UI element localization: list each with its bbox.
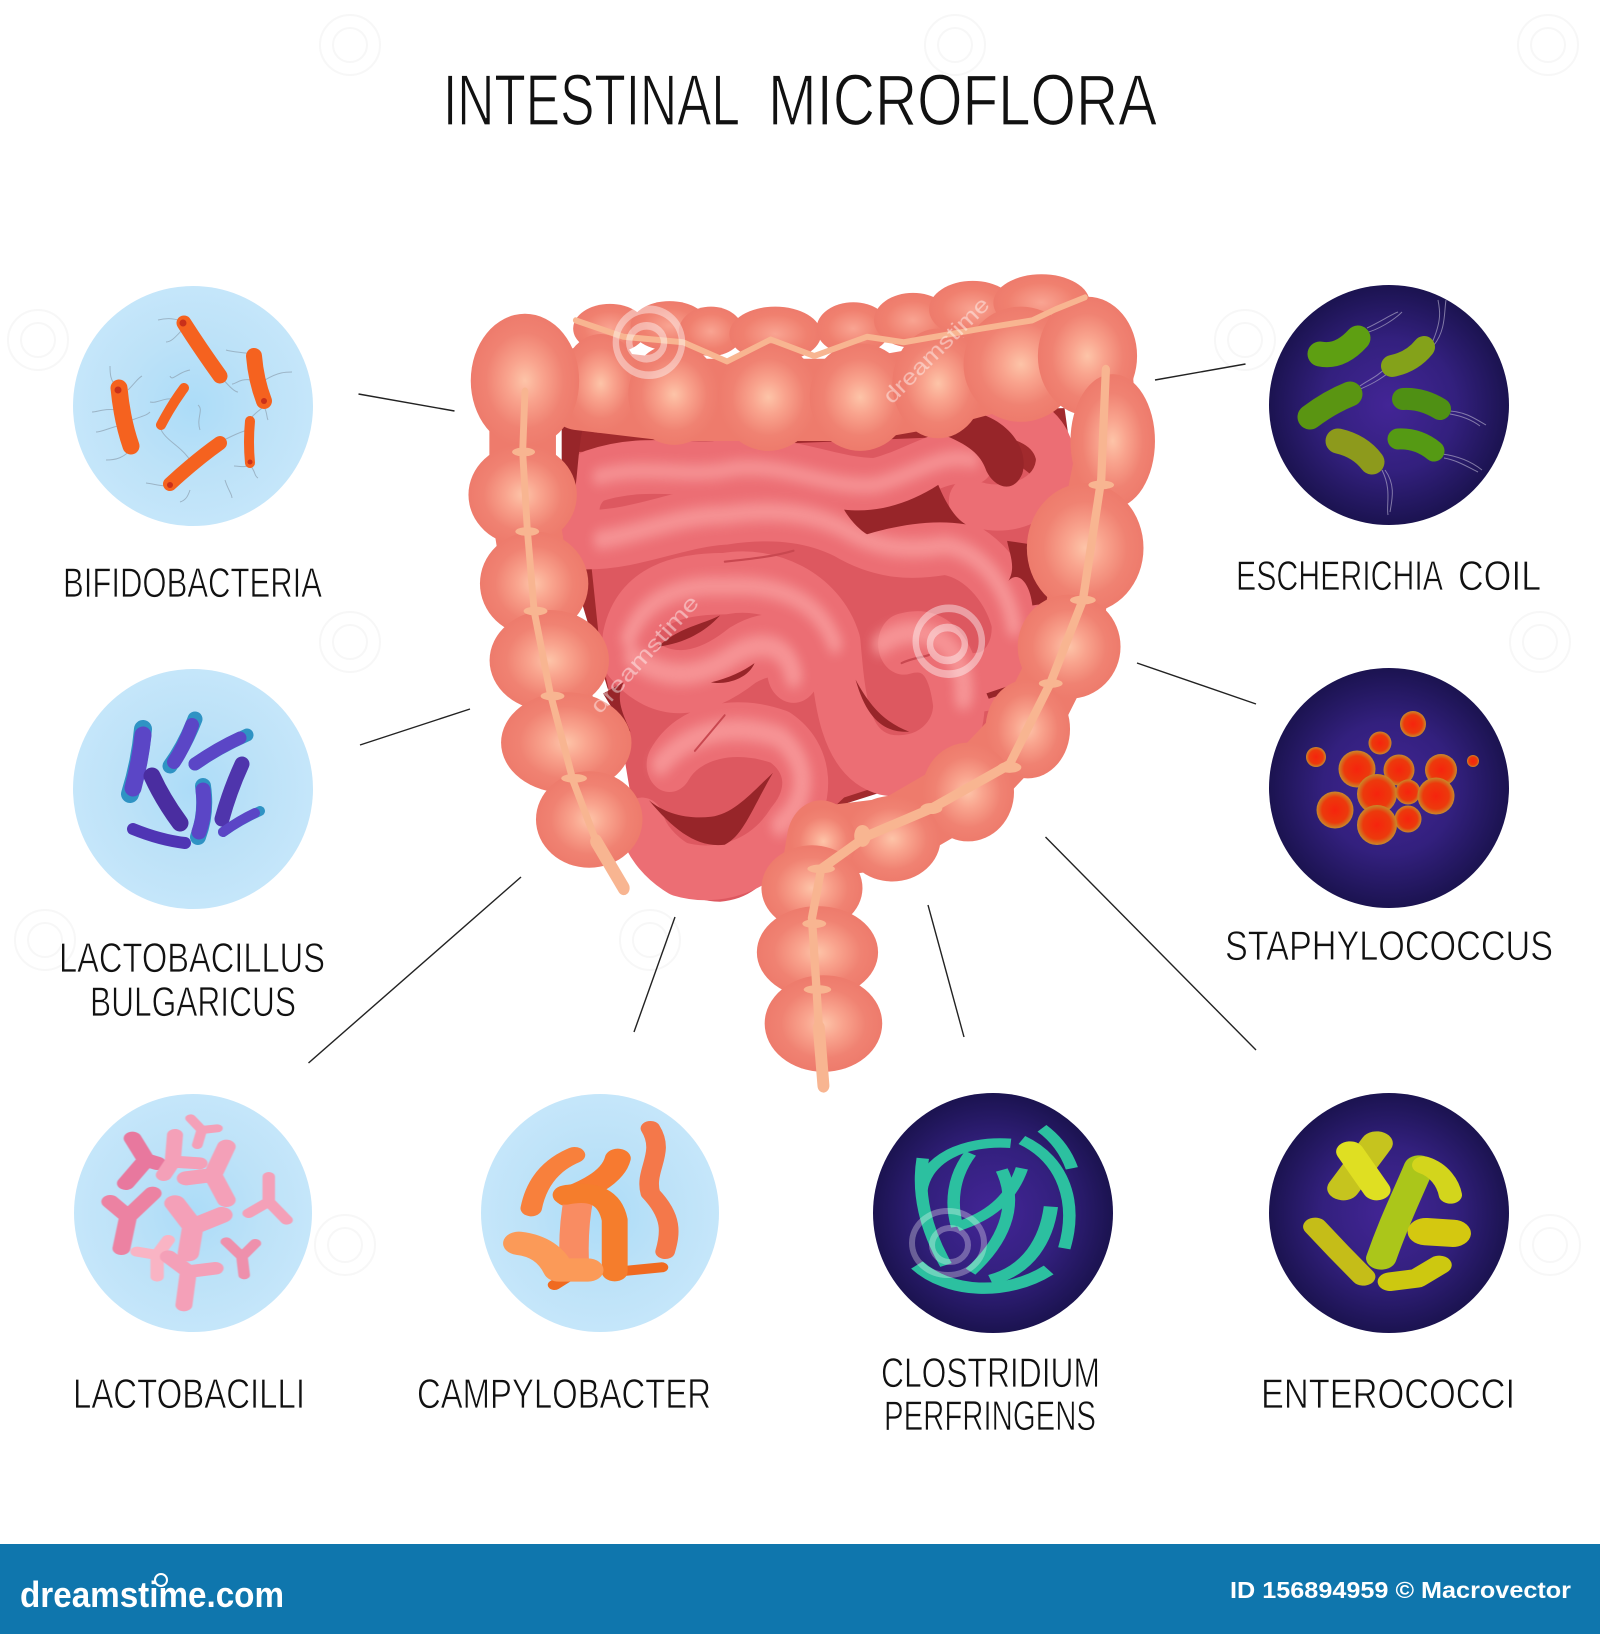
leader lines bbox=[308, 364, 1256, 1063]
small intestine bbox=[562, 411, 1055, 902]
panel: staphylococcus bbox=[1269, 668, 1509, 908]
label: lactobacillus bulgaricus: BULGARICUS bbox=[90, 978, 296, 1025]
title: INTESTINAL bbox=[443, 61, 740, 141]
bacteria: orange curved rods bbox=[519, 1128, 669, 1285]
colon: ascending haustra bbox=[468, 314, 643, 868]
taenia bands bbox=[523, 297, 1106, 1085]
panel: clostridium perfringens bbox=[873, 1093, 1113, 1333]
dark abdominal cavity bbox=[564, 408, 1078, 830]
title: MICROFLORA bbox=[768, 61, 1157, 141]
bacteria: red cocci cluster bbox=[1306, 711, 1479, 845]
panel: enterococci bbox=[1269, 1093, 1509, 1333]
label: clostridium perfringens: PERFRINGENS bbox=[884, 1392, 1096, 1439]
label: lactobacillus bulgaricus: LACTOBACILLUS bbox=[59, 934, 325, 981]
watermark spiral bbox=[912, 1211, 984, 1275]
bacteria: teal filaments bbox=[917, 1128, 1072, 1288]
watermark captions on intestine: dreamstime bbox=[585, 590, 704, 718]
panel: campylobacter bbox=[481, 1094, 719, 1332]
band highlights bbox=[598, 458, 1014, 825]
label: bifidobacteria: BIFIDOBACTERIA bbox=[63, 559, 322, 606]
label: clostridium perfringens: CLOSTRIDIUM bbox=[881, 1349, 1100, 1396]
bacteria: purple rods bbox=[130, 719, 260, 843]
taenia nodes bbox=[512, 448, 1114, 994]
colon: transverse haustra bbox=[562, 297, 1137, 451]
colon: back row of haustra bbox=[573, 274, 1090, 361]
bacteria: bifidobacteria rods bbox=[92, 319, 292, 502]
panel: lactobacilli bbox=[74, 1094, 312, 1332]
watermark captions on intestine: dreamstime bbox=[878, 292, 995, 409]
background watermarks bbox=[8, 15, 1580, 1275]
colon: descending haustra bbox=[790, 374, 1155, 881]
bacteria: green flagellated rods bbox=[1310, 300, 1486, 515]
panel: bifidobacteria bbox=[73, 286, 313, 526]
colon silhouette bbox=[523, 353, 1108, 1022]
dark gaps and folds bbox=[562, 411, 1048, 845]
label: escherichia coil: ESCHERICHIA bbox=[1236, 552, 1443, 599]
label: clostridium perfringens bbox=[881, 1349, 1100, 1439]
intestinal bands bbox=[579, 414, 1055, 873]
thin fold lines bbox=[695, 551, 929, 751]
bacteria: yellow chains bbox=[1315, 1143, 1453, 1282]
bacteria: pink y-shapes bbox=[110, 1118, 287, 1305]
intestine illustration bbox=[468, 274, 1155, 1085]
watermark captions on intestine bbox=[585, 292, 995, 718]
label: campylobacter: CAMPYLOBACTER bbox=[417, 1370, 711, 1417]
small intestine base bbox=[569, 436, 1046, 902]
panel: escherichia coli bbox=[1269, 285, 1509, 525]
label: lactobacillus bulgaricus bbox=[59, 934, 325, 1025]
title bbox=[443, 61, 1157, 141]
label: enterococci: ENTEROCOCCI bbox=[1261, 1370, 1515, 1417]
watermark spirals on intestine bbox=[616, 309, 982, 674]
panel: lactobacillus bulgaricus bbox=[73, 669, 313, 909]
colon: sigmoid and rectum bbox=[757, 845, 882, 1072]
footer credit: ID 156894959 © Macrovector bbox=[1230, 1577, 1571, 1603]
footer logo: dreamstime.com bbox=[20, 1574, 284, 1615]
footer bar bbox=[0, 1544, 1600, 1634]
label: lactobacilli: LACTOBACILLI bbox=[73, 1370, 305, 1417]
label: escherichia coil: COIL bbox=[1458, 552, 1541, 599]
